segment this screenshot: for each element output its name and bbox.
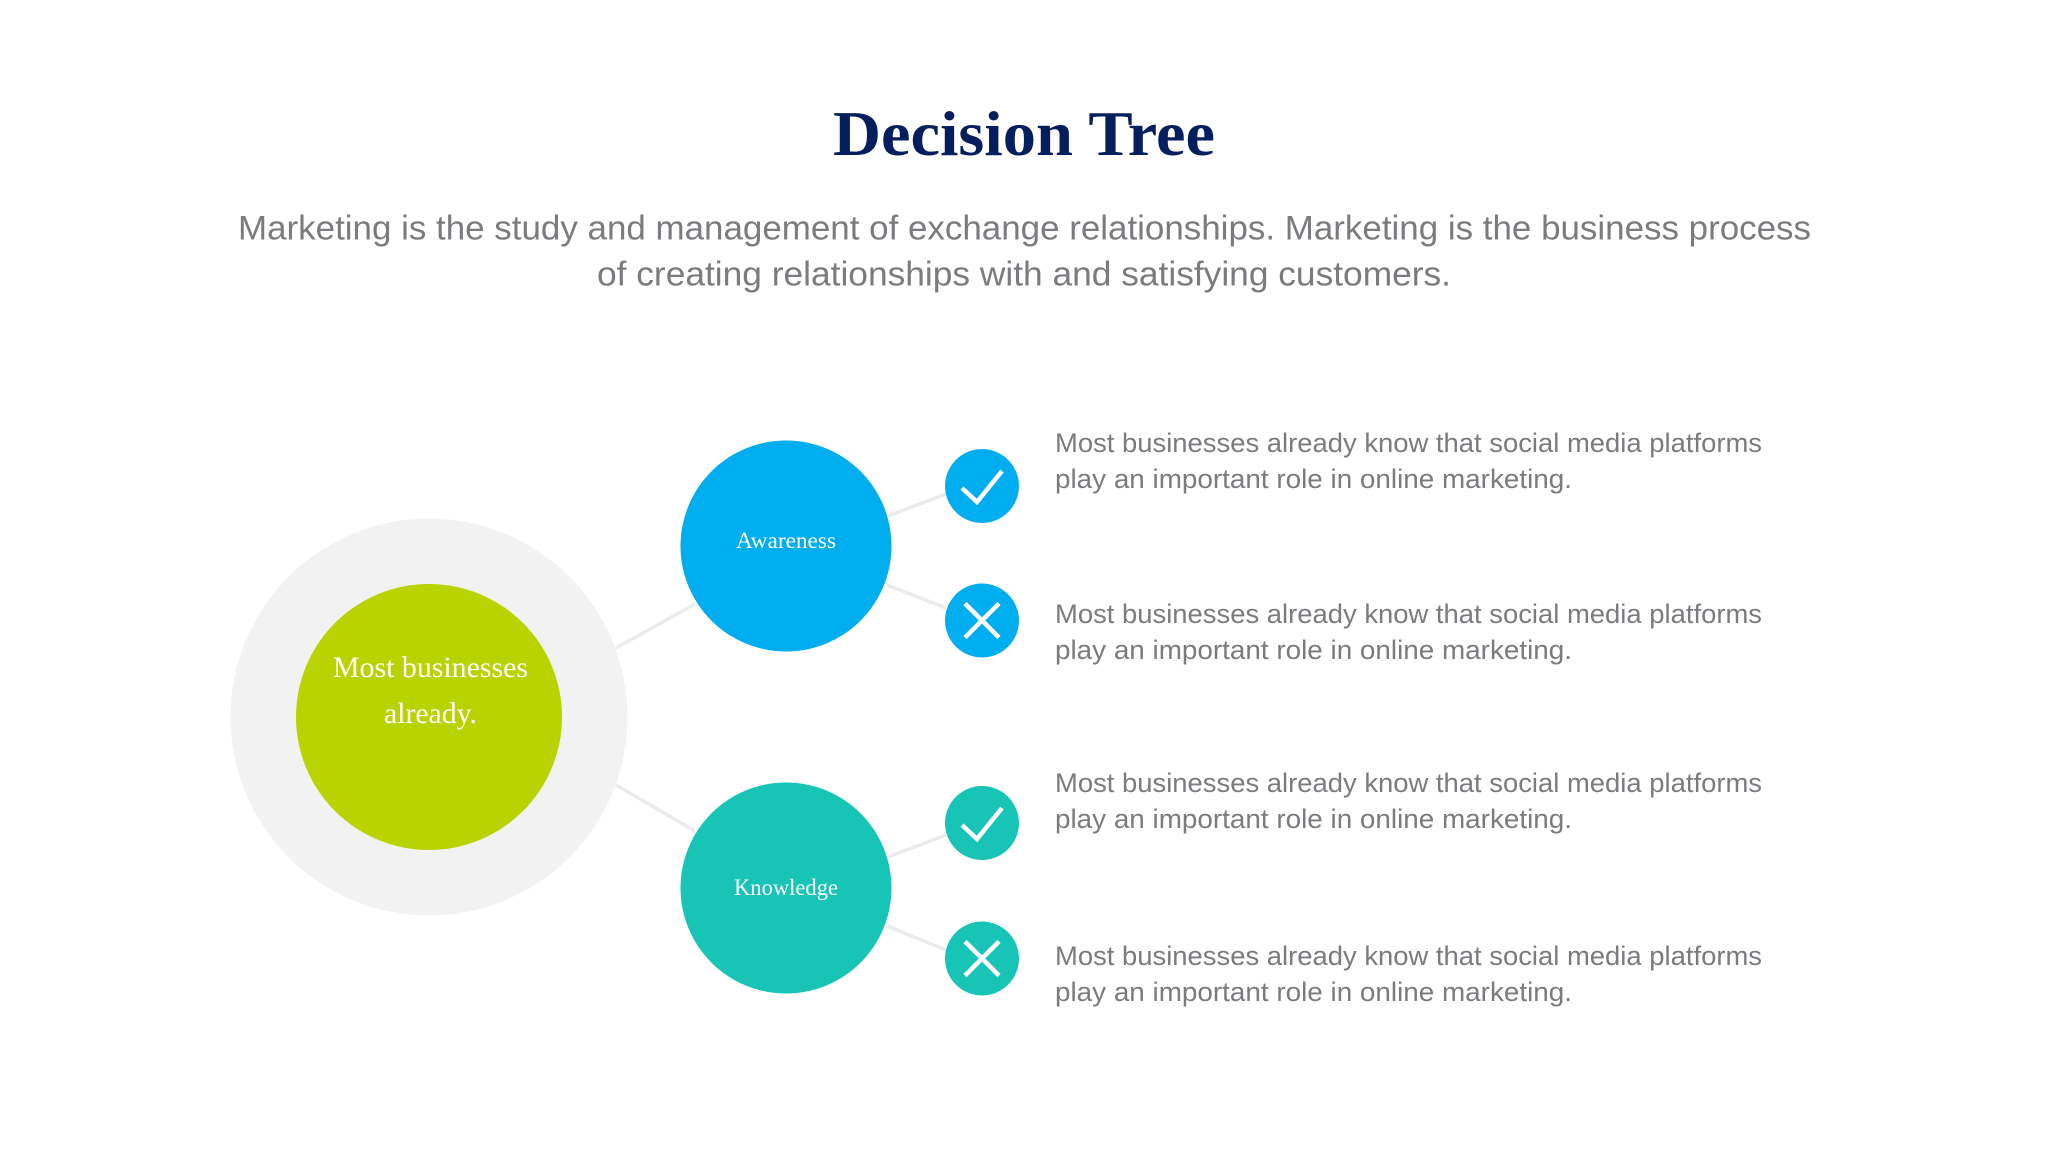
text block 3: play an important role in online marketing. <box>1055 804 1572 834</box>
text block 4: play an important role in online marketing. <box>1055 977 1572 1007</box>
text block 2: Most businesses already know that social media platforms <box>1055 599 1762 629</box>
node: Knowledge: Knowledge <box>734 875 838 900</box>
text block 3 <box>1055 768 1762 834</box>
root node <box>230 518 628 916</box>
text block 1: Most businesses already know that social media platforms <box>1055 428 1762 458</box>
icon: check teal <box>945 786 1019 860</box>
subtitle text: Marketing is the study and management of exchange relationships. Marketing is the business process <box>238 210 1811 248</box>
icon: cross teal <box>945 922 1019 996</box>
node: Knowledge <box>680 782 892 994</box>
node: Awareness: Awareness <box>736 528 836 553</box>
node: Awareness <box>680 440 892 652</box>
icon: check blue <box>945 449 1019 523</box>
connector lines <box>616 494 946 950</box>
subtitle text: of creating relationships with and satisfying customers. <box>597 256 1451 294</box>
text block 1 <box>1055 428 1762 494</box>
text block 3: Most businesses already know that social media platforms <box>1055 768 1762 798</box>
text block 1: play an important role in online marketing. <box>1055 464 1572 494</box>
text block 4: Most businesses already know that social media platforms <box>1055 941 1762 971</box>
icon: cross blue <box>945 584 1019 658</box>
text block 2: play an important role in online marketing. <box>1055 635 1572 665</box>
root node: already. <box>384 697 477 730</box>
root node: Most businesses <box>333 651 528 684</box>
subtitle text <box>238 210 1811 294</box>
text block 4 <box>1055 941 1762 1007</box>
text block 2 <box>1055 599 1762 665</box>
title: Decision Tree <box>833 98 1215 169</box>
